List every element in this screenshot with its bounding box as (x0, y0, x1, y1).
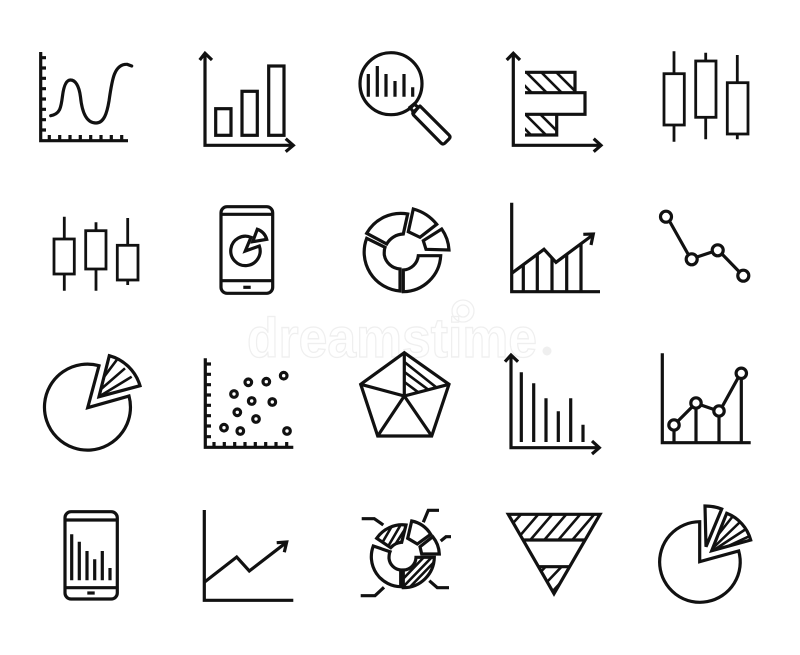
icon: phone with bars (65, 512, 117, 599)
icon: candlesticks large (664, 51, 748, 142)
icon: pentagon radar (361, 353, 449, 436)
icon: pie with two slices (660, 506, 752, 602)
icon: descending bars with arrows (505, 355, 599, 454)
icon: candlesticks small (54, 217, 138, 291)
icon: bar chart with arrows (200, 53, 293, 152)
icon: growth arrow chart (204, 510, 293, 600)
watermark: dreamstime (247, 306, 537, 369)
icon: line chart with nodes (662, 353, 751, 443)
icon: horizontal hatched bars (507, 53, 601, 152)
icon: descending dot line (660, 211, 749, 281)
icon: segmented donut (364, 209, 449, 292)
icon: inverted funnel (504, 510, 610, 594)
icon: phone with pie chart (221, 207, 273, 293)
icon: wave line chart (41, 52, 132, 141)
icon: hatched donut with callouts (361, 510, 451, 596)
icon: growth chart with verticals (512, 203, 600, 292)
icon: scatter plot (205, 358, 293, 447)
icon: magnifier with bars (360, 53, 450, 144)
icon: pie with hatched slice (44, 356, 140, 450)
